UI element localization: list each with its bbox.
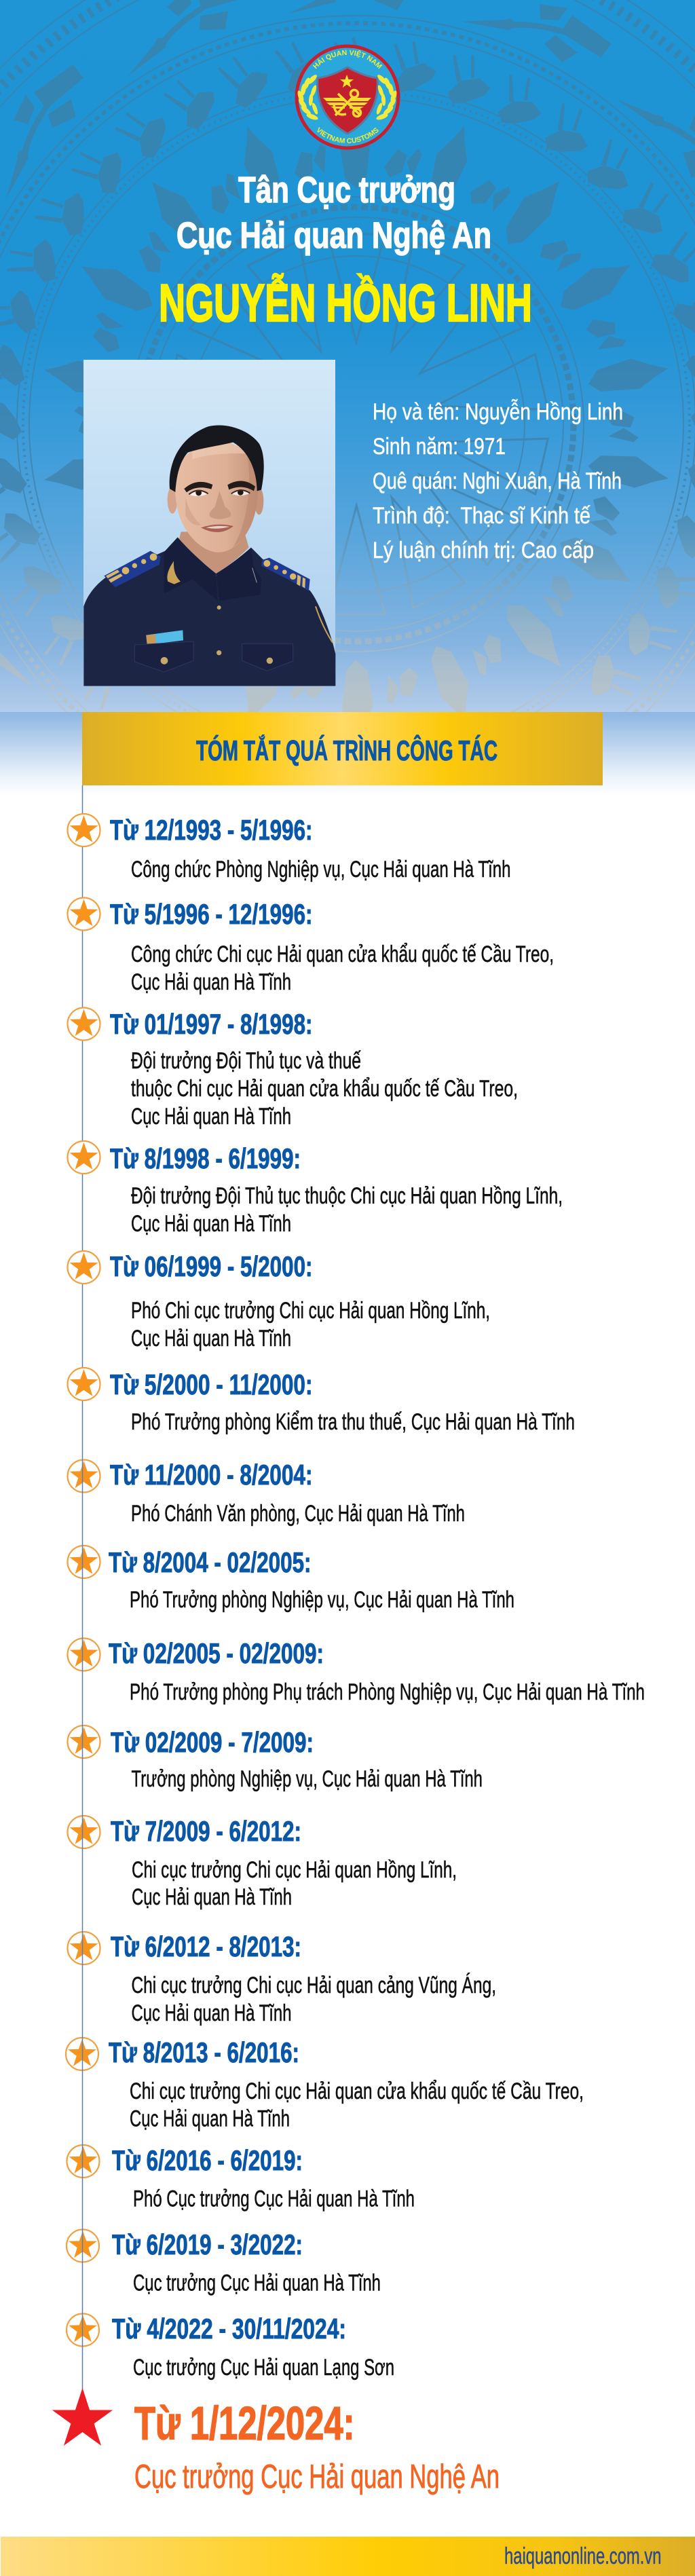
timeline entry 9: Từ 02/2005 - 02/2009: — [109, 1637, 324, 1669]
timeline entry 14: Phó Cục trưởng Cục Hải quan Hà Tĩnh — [133, 2186, 415, 2211]
title — [176, 170, 491, 256]
section banner — [82, 712, 603, 785]
timeline entry 16 — [67, 2313, 394, 2381]
heading: person name: NGUYỄN HỒNG LINH — [159, 273, 532, 333]
timeline entry 5: Từ 06/1999 - 5/2000: — [110, 1250, 312, 1282]
portrait photo — [83, 360, 335, 686]
timeline entry 5: Cục Hải quan Hà Tĩnh — [131, 1326, 291, 1351]
timeline entry 14: Từ 6/2016 - 6/2019: — [112, 2144, 303, 2176]
timeline entry 11: Từ 7/2009 - 6/2012: — [111, 1815, 301, 1847]
personal information text: Trình độ: Thạc sĩ Kinh tế — [373, 503, 590, 529]
timeline entry 3: Đội trưởng Đội Thủ tục và thuế — [131, 1048, 361, 1074]
fade band behind section banner — [0, 712, 695, 796]
timeline entry 12 — [68, 1930, 496, 2026]
timeline entry 1: Công chức Phòng Nghiệp vụ, Cục Hải quan Hà Tĩnh — [131, 857, 510, 882]
timeline entry 5 — [68, 1250, 490, 1351]
icon: Vietnam Customs emblem — [295, 45, 400, 149]
timeline entry 7: Từ 11/2000 - 8/2004: — [110, 1459, 312, 1491]
timeline entry 4 — [68, 1141, 563, 1237]
timeline entry 10: Trưởng phòng Nghiệp vụ, Cục Hải quan Hà Tĩnh — [132, 1766, 483, 1792]
timeline entry 1 — [68, 814, 510, 882]
timeline entry 14 — [67, 2144, 415, 2211]
timeline entry 8: Phó Trưởng phòng Nghiệp vụ, Cục Hải quan Hà Tĩnh — [130, 1587, 514, 1613]
timeline entry 2: Cục Hải quan Hà Tĩnh — [131, 969, 291, 995]
timeline entry 15: Từ 6/2019 - 3/2022: — [112, 2228, 303, 2260]
timeline entry 6: Từ 5/2000 - 11/2000: — [110, 1368, 312, 1400]
current position date: Từ 1/12/2024: — [134, 2397, 354, 2449]
title: Cục Hải quan Nghệ An — [176, 215, 491, 256]
icon: red star — [52, 2388, 113, 2446]
timeline entry 1: Từ 12/1993 - 5/1996: — [110, 814, 312, 846]
personal information text — [373, 399, 623, 563]
timeline entry 6 — [68, 1368, 575, 1435]
timeline entry 3 — [68, 1007, 518, 1130]
timeline entry 15 — [67, 2228, 381, 2296]
timeline entry 7 — [68, 1459, 465, 1527]
footer bar — [1, 2537, 695, 2576]
timeline entry 12: Từ 6/2012 - 8/2013: — [111, 1930, 301, 1962]
timeline entry 10: Từ 02/2009 - 7/2009: — [111, 1726, 314, 1758]
timeline entry 9 — [68, 1637, 645, 1705]
timeline entry 12: Cục Hải quan Hà Tĩnh — [132, 2000, 292, 2026]
timeline entry 7: Phó Chánh Văn phòng, Cục Hải quan Hà Tĩnh — [131, 1501, 465, 1527]
timeline entry 13: Cục Hải quan Hà Tĩnh — [130, 2106, 290, 2131]
title: Tân Cục trưởng — [238, 170, 455, 210]
timeline entry 15: Cục trưởng Cục Hải quan Hà Tĩnh — [133, 2270, 381, 2296]
timeline entry 13 — [66, 2036, 584, 2131]
icon: Vietnam Customs emblem: VIETNAM CUSTOMS — [318, 127, 379, 144]
icon: Vietnam Customs emblem: HẢI QUAN VIỆT NAM — [312, 50, 383, 69]
timeline line upper — [81, 785, 83, 1459]
personal information text: Quê quán: Nghi Xuân, Hà Tĩnh — [373, 468, 622, 494]
timeline entry 16: Cục trưởng Cục Hải quan Lạng Sơn — [133, 2355, 394, 2381]
timeline entry 11: Cục Hải quan Hà Tĩnh — [132, 1884, 292, 1910]
timeline entry 8 — [68, 1546, 514, 1613]
personal information text: Sinh năm: 1971 — [373, 434, 506, 460]
current position title: Cục trưởng Cục Hải quan Nghệ An — [134, 2459, 500, 2495]
personal information text: Lý luận chính trị: Cao cấp — [373, 538, 594, 563]
personal information text: Họ và tên: Nguyễn Hồng Linh — [373, 399, 623, 425]
timeline entry 3: Cục Hải quan Hà Tĩnh — [131, 1104, 291, 1130]
timeline entry 12: Chi cục trưởng Chi cục Hải quan cảng Vũng Áng, — [132, 1973, 496, 1998]
header blue gradient panel — [0, 0, 695, 712]
timeline entry 3: Từ 01/1997 - 8/1998: — [110, 1008, 312, 1040]
timeline entry 13: Từ 8/2013 - 6/2016: — [109, 2036, 299, 2068]
timeline entry 11: Chi cục trưởng Chi cục Hải quan Hồng Lĩnh, — [132, 1857, 457, 1883]
timeline entry 4: Cục Hải quan Hà Tĩnh — [131, 1211, 291, 1237]
timeline entry 2: Từ 5/1996 - 12/1996: — [110, 898, 312, 930]
timeline entry 5: Phó Chi cục trưởng Chi cục Hải quan Hồng Lĩnh, — [131, 1298, 490, 1324]
timeline entry 3: thuộc Chi cục Hải quan cửa khẩu quốc tế Cầu Treo, — [131, 1076, 518, 1102]
section banner: TÓM TẮT QUÁ TRÌNH CÔNG TÁC — [196, 734, 497, 766]
timeline entry 4: Từ 8/1998 - 6/1999: — [110, 1142, 301, 1174]
timeline entry 2 — [68, 897, 554, 995]
timeline entry 16: Từ 4/2022 - 30/11/2024: — [112, 2313, 346, 2345]
timeline entry 11 — [68, 1815, 457, 1910]
timeline entry 8: Từ 8/2004 - 02/2005: — [109, 1546, 311, 1578]
timeline entry 10 — [68, 1725, 483, 1792]
timeline line lower — [81, 1459, 83, 2393]
